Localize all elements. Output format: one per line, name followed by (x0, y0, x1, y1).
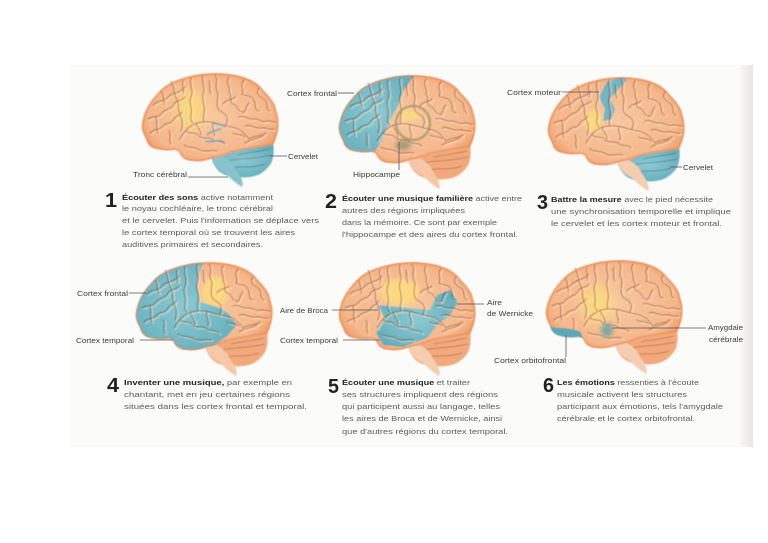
label: Cortex moteur (507, 88, 599, 97)
label: Cervelet (670, 163, 714, 172)
text block 6: participant aux émotions, tels l'amygdale (557, 402, 723, 411)
label: Aire de Wernicke: Aire (487, 298, 502, 307)
number 5: 5 (328, 376, 339, 398)
text block 5: ses structures impliquent des régions (342, 390, 498, 399)
page background panel (70, 65, 753, 447)
text block 6: cérébrale et le cortex orbitofrontal. (557, 414, 695, 423)
text block 3: une synchronisation temporelle et implique (551, 207, 731, 216)
text block 6 (557, 378, 723, 423)
brain 6 illustration (542, 260, 683, 374)
label: Aire de Broca (280, 306, 378, 315)
panel 1: listening to sounds (105, 73, 319, 249)
label: Tronc cérébral: Tronc cérébral (133, 170, 187, 179)
text block 5: Écouter une musique et traiter (342, 378, 471, 387)
number 2: 2 (325, 191, 337, 213)
label: Cortex frontal: Cortex frontal (287, 89, 337, 98)
label: Cortex temporal (76, 336, 173, 345)
text block 1: le noyau cochléaire, le tronc cérébral (122, 204, 273, 213)
label: Aire de Broca: Aire de Broca (280, 306, 329, 315)
label: Cortex temporal: Cortex temporal (280, 336, 338, 345)
label: Cortex moteur: Cortex moteur (507, 88, 562, 97)
label: Cervelet (270, 152, 319, 161)
label: Tronc cérébral (133, 170, 228, 179)
panel 4: inventing music (76, 257, 307, 411)
text block 1: le cortex temporal où se trouvent les aires (122, 228, 295, 237)
text block 2: autres des régions impliquées (342, 206, 465, 215)
text block 4: situées dans les cortex frontal et temporal. (124, 402, 307, 411)
label: Cervelet: Cervelet (683, 163, 714, 172)
brain 3 illustration (548, 76, 685, 191)
text block 1 (122, 193, 319, 249)
brain 5 illustration (339, 262, 476, 376)
label: Cervelet: Cervelet (288, 152, 319, 161)
number 4: 4 (107, 375, 120, 397)
text block 1: auditives primaires et secondaires. (122, 240, 263, 249)
label: Hippocampe (353, 142, 400, 179)
text block 3: le cervelet et les cortex moteur et frontal. (551, 219, 722, 228)
label: Hippocampe: Hippocampe (353, 170, 400, 179)
panel 5: listening and language (280, 262, 533, 436)
label: Cortex temporal: Cortex temporal (76, 336, 134, 345)
label: Cortex orbitofrontal: Cortex orbitofrontal (494, 356, 566, 365)
label: Cortex orbitofrontal (494, 335, 566, 365)
text block 2 (342, 194, 522, 239)
label: Cortex frontal (77, 289, 146, 298)
text block 1: et le cervelet. Puis l'information se déplace vers (122, 216, 319, 225)
text block 4: chantant, met en jeu certaines régions (124, 390, 290, 399)
text block 3 (551, 195, 731, 228)
brain 4 illustration (130, 257, 273, 376)
brain 1 illustration (142, 73, 279, 187)
panel 3: keeping the beat (507, 76, 731, 228)
number 1: 1 (105, 190, 117, 212)
label: Cortex temporal (280, 336, 380, 345)
label: Amygdale cérébrale: Amygdale (708, 323, 743, 332)
panel 6: emotions (494, 260, 743, 423)
text block 6: Les émotions ressenties à l'écoute (557, 378, 699, 387)
text block 5: les aires de Broca et de Wernicke, ainsi (342, 414, 502, 423)
text block 2: l'hippocampe et des aires du cortex frontal. (342, 230, 518, 239)
text block 4 (124, 378, 307, 411)
label: Aire de Wernicke: de Wernicke (487, 309, 533, 318)
label: Amygdale cérébrale: cérébrale (709, 335, 743, 344)
number 3: 3 (537, 192, 548, 214)
text block 5: que d'autres régions du cortex temporal. (342, 427, 508, 436)
text block 2: Écouter une musique familière active entre (342, 194, 522, 203)
text block 5: qui participent aussi au langage, telles (342, 402, 500, 411)
brain 2 illustration (333, 70, 476, 189)
text block 4: Inventer une musique, par exemple en (124, 378, 292, 387)
panel 2: familiar music (287, 70, 522, 239)
text block 1: Écouter des sons active notamment (122, 193, 274, 202)
text block 5 (342, 378, 508, 436)
label: Cortex frontal (287, 89, 354, 98)
label: Amygdale cérébrale (612, 323, 743, 344)
text block 3: Battre la mesure avec le pied nécessite (551, 195, 713, 204)
text block 6: musicale activent les structures (557, 390, 687, 399)
number 6: 6 (543, 375, 554, 397)
text block 2: dans la mémoire. Ce sont par exemple (342, 218, 497, 227)
label: Aire de Wernicke (457, 298, 533, 318)
label: Cortex frontal: Cortex frontal (77, 289, 128, 298)
